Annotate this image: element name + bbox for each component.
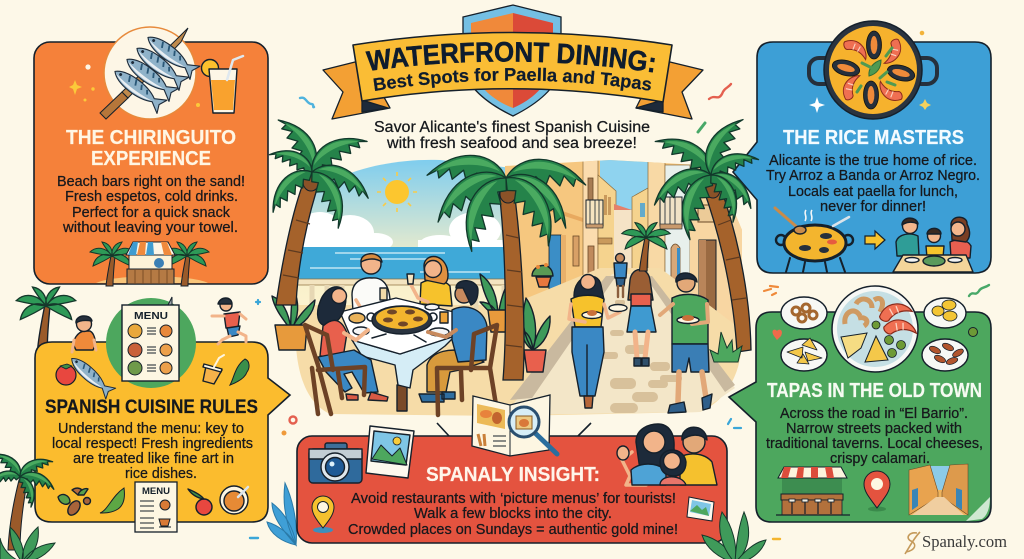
icon: main menu on green circle: MENU [134,310,168,322]
icon: leaf [230,359,249,385]
palm tree right [646,111,760,352]
sun [377,172,417,212]
title subtitle text: Best Spots for Paella and Tapas [373,68,652,91]
railing [296,279,511,312]
paella on table [367,306,437,334]
body text: Understand the menu: key to [58,421,244,437]
tagline [374,119,650,152]
icon: small palm top left [16,287,76,346]
body text [52,421,253,482]
title text: WATERFRONT DINING: [365,42,655,72]
icon: small photo [687,497,714,521]
icon: family at table [893,217,973,272]
icon: potato wedges plate [781,338,827,371]
icon: meat plate [922,339,968,371]
grass tuft right [710,332,742,362]
man white shirt [352,254,390,312]
body text: Avoid restaurants with ‘picture menus’ for tourists! [351,491,676,507]
woman with plates [569,274,627,408]
diners at table [305,254,497,415]
body text: Alicante is the true home of rice. [769,153,977,169]
heading: EXPERIENCE [91,148,211,170]
hanging plant pot [532,263,553,287]
icon: olive [968,328,978,336]
blue fern [267,483,296,545]
icon: apple [188,489,212,515]
plant bottom right [702,512,766,559]
rays [437,423,591,436]
heading: SPANALY INSIGHT: [426,463,600,486]
body text: without leaving your towel. [62,220,238,236]
heading: SPANISH CUISINE RULES [45,396,258,418]
icon: small menu [135,482,177,532]
icon: boy peeking [72,316,96,352]
body text: Narrow streets packed with [786,421,962,437]
icon: heart [772,330,782,340]
decorative squiggles and confetti [250,31,989,539]
icon: tavern stall [776,467,850,515]
table with cloth [340,298,458,411]
body text: Crowded places on Sundays = authentic gold mine! [348,522,678,538]
shield [463,5,561,116]
icon: photo print [366,426,414,478]
icon: steam [805,210,812,221]
walkers on the street [569,254,712,413]
potted plant mid [522,298,550,372]
icon: pan on burner [775,208,853,272]
panel: tapas in the old town [729,286,991,522]
woman walking away [627,270,656,366]
potted plant back [480,274,511,332]
street palm small [622,223,670,271]
arrow [865,231,885,249]
body text [766,153,980,215]
icon: herb leaf [100,488,124,513]
body text: local respect! Fresh ingredients [52,436,253,452]
panel: the rice masters [733,21,991,273]
panel: the chiringuito experience [34,27,268,286]
icon: paella pan [809,21,937,119]
body text: Fresh espetos, cold drinks. [65,189,238,205]
sparkles [809,97,931,113]
body text: rice dishes. [125,466,197,482]
icon: old town alley [909,464,968,515]
body text: Across the road in “El Barrio”. [780,406,968,422]
body text [766,406,983,467]
sparkles [69,64,200,107]
sea [295,247,511,285]
icon: waving family [617,424,717,485]
icon: ingredients [58,488,90,517]
icon: orange drink [202,56,243,113]
icon: sardine skewer [100,27,200,119]
icon: open menu with magnifier [472,395,557,456]
cobblestones [602,300,682,413]
potted plant left [272,288,315,350]
woman yellow top [407,256,452,306]
body text: never for dinner! [820,199,926,215]
icon: map pin [312,496,334,533]
fold corner [966,497,990,521]
panel: spanaly insight [267,395,727,545]
panel background blue [733,42,991,273]
icon: fish [67,353,116,399]
heading: THE CHIRINGUITO [66,127,236,149]
woman coral shirt with chair [305,287,388,414]
icon: soup bowl [220,486,248,514]
icon: big tapas plate [832,286,919,372]
body text: Try Arroz a Banda or Arroz Negro. [766,168,980,184]
panel background orange [34,42,268,284]
palm tree left [262,111,375,305]
body text [348,491,678,538]
floor and street [295,268,742,416]
icon: runner [212,298,246,344]
panel background red [297,436,727,543]
palm tree center [426,154,588,380]
icon: location pin [864,471,890,512]
panel background green [729,312,991,522]
body text [57,174,245,236]
man blue shirt with chair [419,281,497,415]
body text: Locals eat paella for lunch, [788,184,958,200]
icon: camera [309,443,362,483]
sky [296,160,512,310]
tagline: Savor Alicante's finest Spanish Cuisine [374,119,650,136]
icon: calamari plate [781,297,827,329]
central illustration [262,111,760,416]
body text: Perfect for a quick snack [72,205,231,221]
icon: main menu on green circle [106,297,196,388]
panel background yellow [35,342,290,522]
icon: tomato [56,364,76,385]
far person [614,254,627,297]
panel: spanish cuisine rules [16,287,290,532]
ribbon tails [323,62,703,119]
logo text: Spanaly.com [922,532,1007,551]
heading: TAPAS IN THE OLD TOWN [767,380,982,402]
icon: drink cup [203,355,224,384]
icon: cheese chunks plate [924,298,966,328]
palm and grass bottom left [0,447,57,559]
body text: Walk a few blocks into the city. [414,506,612,522]
ribbon banner [353,32,672,102]
man in green [660,273,712,413]
icon: small menu: MENU [142,486,170,496]
clouds [294,212,510,260]
logo: spanaly.com [905,532,1007,554]
logo mark [905,532,920,554]
body text: crispy calamari. [830,451,930,467]
body text: Beach bars right on the sand! [57,174,245,190]
title group [322,4,704,120]
heading: THE RICE MASTERS [783,127,964,149]
tagline: with fresh seafood and sea breeze! [386,135,637,152]
body text: traditional taverns. Local cheeses, [766,436,983,452]
heading [66,127,236,170]
body text: are treated like fine art in [73,451,234,467]
buildings [505,160,742,324]
icon: beach bar with palms [90,242,209,286]
